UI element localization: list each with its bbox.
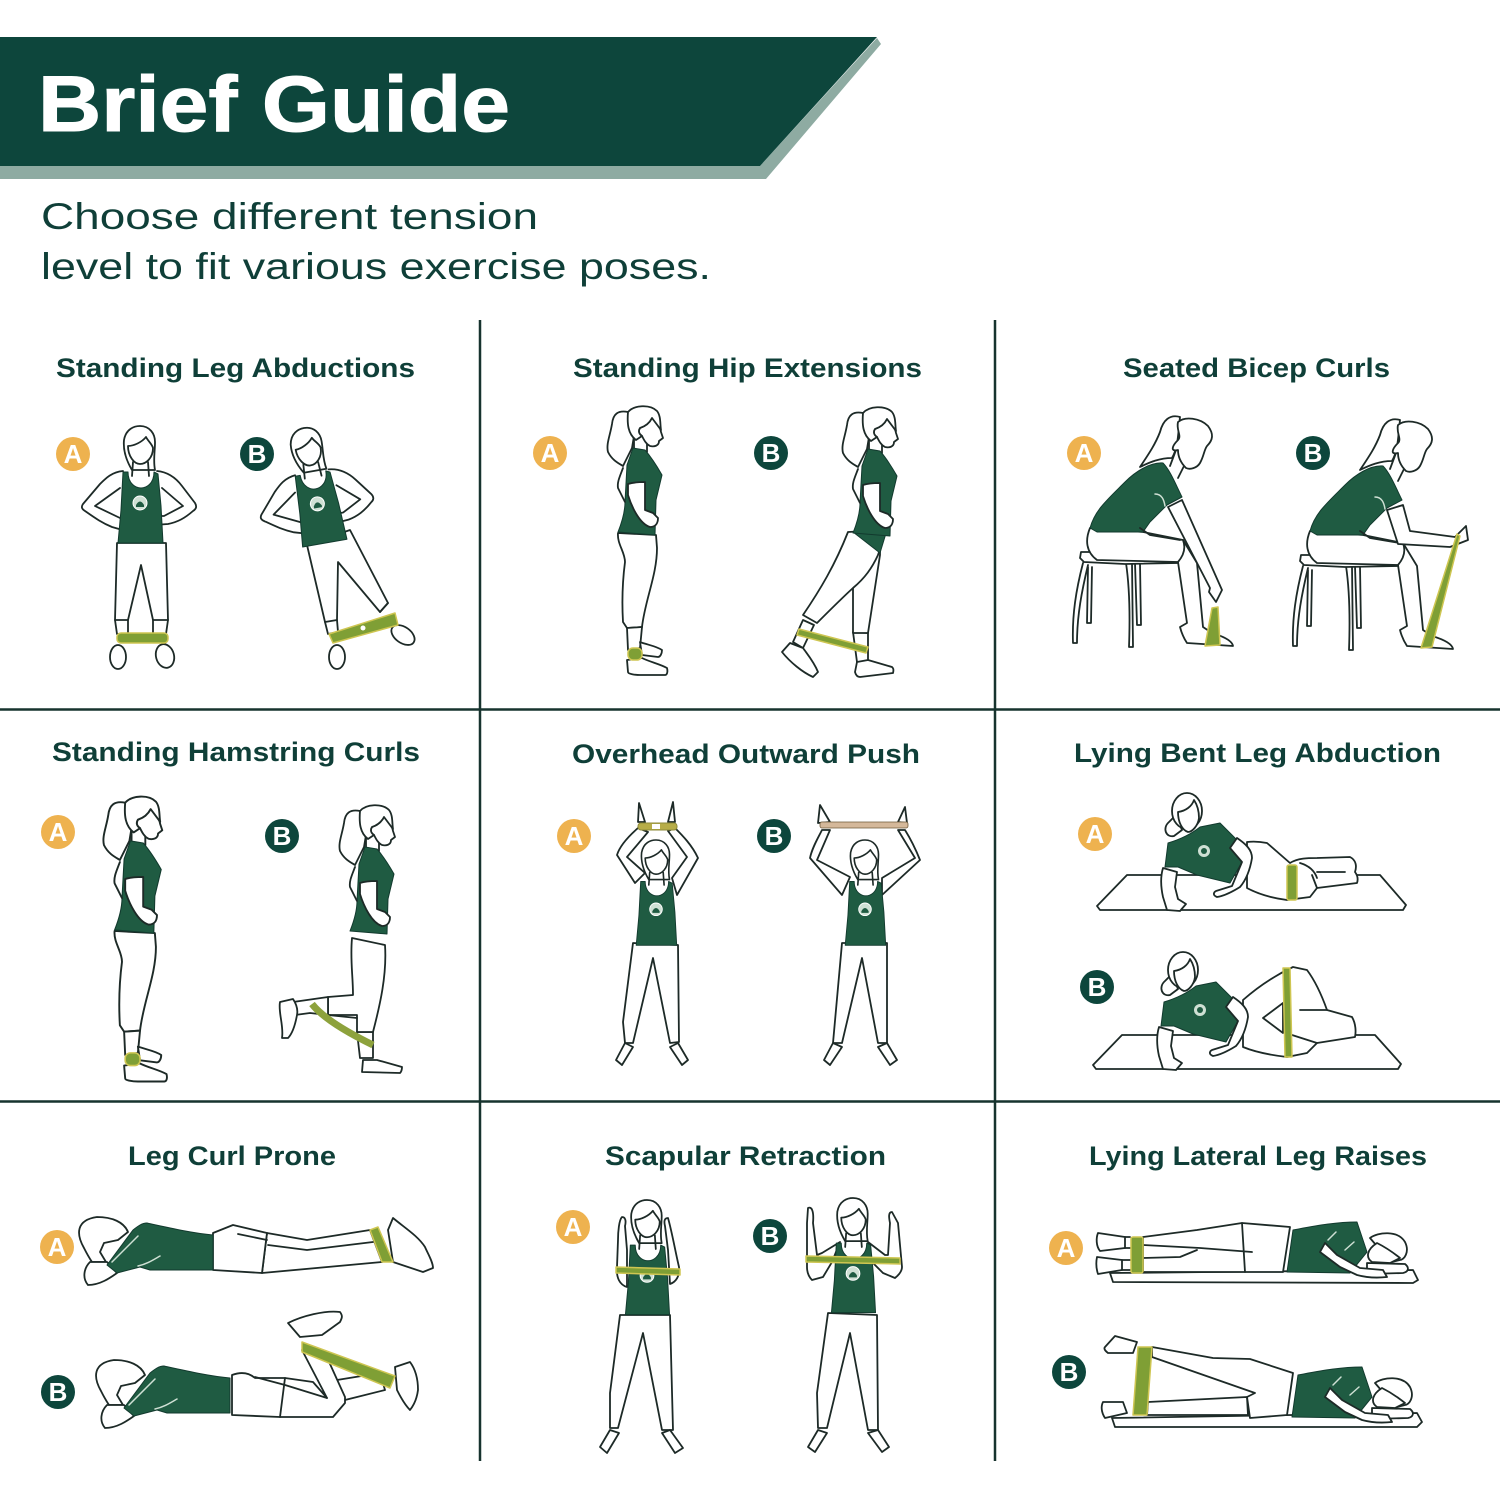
heading: Lying Lateral Leg Raises xyxy=(1089,1141,1427,1171)
badge A: A xyxy=(48,1232,67,1262)
subtitle text: level to fit various exercise poses. xyxy=(41,246,711,287)
heading: Lying Bent Leg Abduction xyxy=(1074,738,1441,768)
panel: overhead outward push xyxy=(557,739,920,1065)
badge B: B xyxy=(248,439,266,469)
figure A xyxy=(1097,793,1406,911)
figure A xyxy=(1073,416,1233,647)
subtitle text: Choose different tension xyxy=(41,196,538,237)
badge A xyxy=(40,1230,74,1264)
figure B xyxy=(247,418,418,669)
figure B xyxy=(1093,952,1401,1070)
badge B: B xyxy=(761,1221,779,1251)
figure A xyxy=(103,797,167,1082)
panel: lying bent leg abduction xyxy=(1074,738,1441,1070)
badge A: A xyxy=(541,438,560,468)
badge B: B xyxy=(1088,972,1106,1002)
badge A: A xyxy=(1075,438,1094,468)
header banner xyxy=(0,37,881,179)
figure A xyxy=(607,406,667,675)
badge B: B xyxy=(49,1377,67,1407)
heading: Standing Hamstring Curls xyxy=(52,737,420,767)
badge A xyxy=(1078,817,1112,851)
badge B xyxy=(1052,1355,1086,1389)
figure B xyxy=(782,407,898,677)
figure A xyxy=(600,1200,683,1453)
panel: leg curl prone xyxy=(40,1141,433,1428)
panel: standing hamstring curls xyxy=(41,737,420,1082)
badge B xyxy=(757,819,791,853)
badge B: B xyxy=(762,438,780,468)
badge A: A xyxy=(565,821,584,851)
heading: Scapular Retraction xyxy=(605,1141,886,1171)
figure B xyxy=(1102,1336,1422,1427)
badge A xyxy=(56,437,90,471)
subtitle text xyxy=(41,196,711,287)
heading: Seated Bicep Curls xyxy=(1123,353,1390,383)
badge A xyxy=(41,815,75,849)
badge B xyxy=(1080,970,1114,1004)
badge B xyxy=(753,1219,787,1253)
badge B xyxy=(265,819,299,853)
figure B xyxy=(806,1198,902,1452)
figure B xyxy=(96,1312,418,1428)
figure A xyxy=(82,426,196,670)
panel: standing leg abductions xyxy=(56,353,418,670)
badge B xyxy=(754,436,788,470)
badge B xyxy=(1296,436,1330,470)
badge A: A xyxy=(1086,819,1105,849)
badge A xyxy=(556,1210,590,1244)
badge A xyxy=(533,436,567,470)
badge A xyxy=(1049,1231,1083,1265)
figure A xyxy=(1096,1222,1418,1283)
badge A xyxy=(557,819,591,853)
figure B xyxy=(810,805,920,1065)
badge A: A xyxy=(1057,1233,1076,1263)
badge A: A xyxy=(49,817,68,847)
badge B xyxy=(240,437,274,471)
figure B xyxy=(1293,419,1468,650)
badge B: B xyxy=(1060,1357,1078,1387)
badge A: A xyxy=(564,1212,583,1242)
badge B: B xyxy=(1304,438,1322,468)
heading: Standing Leg Abductions xyxy=(56,353,415,383)
badge B: B xyxy=(765,821,783,851)
panel: seated bicep curls xyxy=(1067,353,1468,650)
panel: scapular retraction xyxy=(556,1141,902,1453)
heading: Overhead Outward Push xyxy=(572,739,920,769)
badge A xyxy=(1067,436,1101,470)
panel: standing hip extensions xyxy=(533,353,922,677)
figure B xyxy=(280,805,402,1073)
badge A: A xyxy=(64,439,83,469)
heading: Standing Hip Extensions xyxy=(573,353,922,383)
figure A xyxy=(79,1217,433,1285)
figure A xyxy=(616,802,698,1065)
heading: Leg Curl Prone xyxy=(128,1141,336,1171)
badge B: B xyxy=(273,821,291,851)
badge B xyxy=(41,1375,75,1409)
panel: lying lateral leg raises xyxy=(1049,1141,1427,1427)
title: Brief Guide xyxy=(38,59,510,148)
